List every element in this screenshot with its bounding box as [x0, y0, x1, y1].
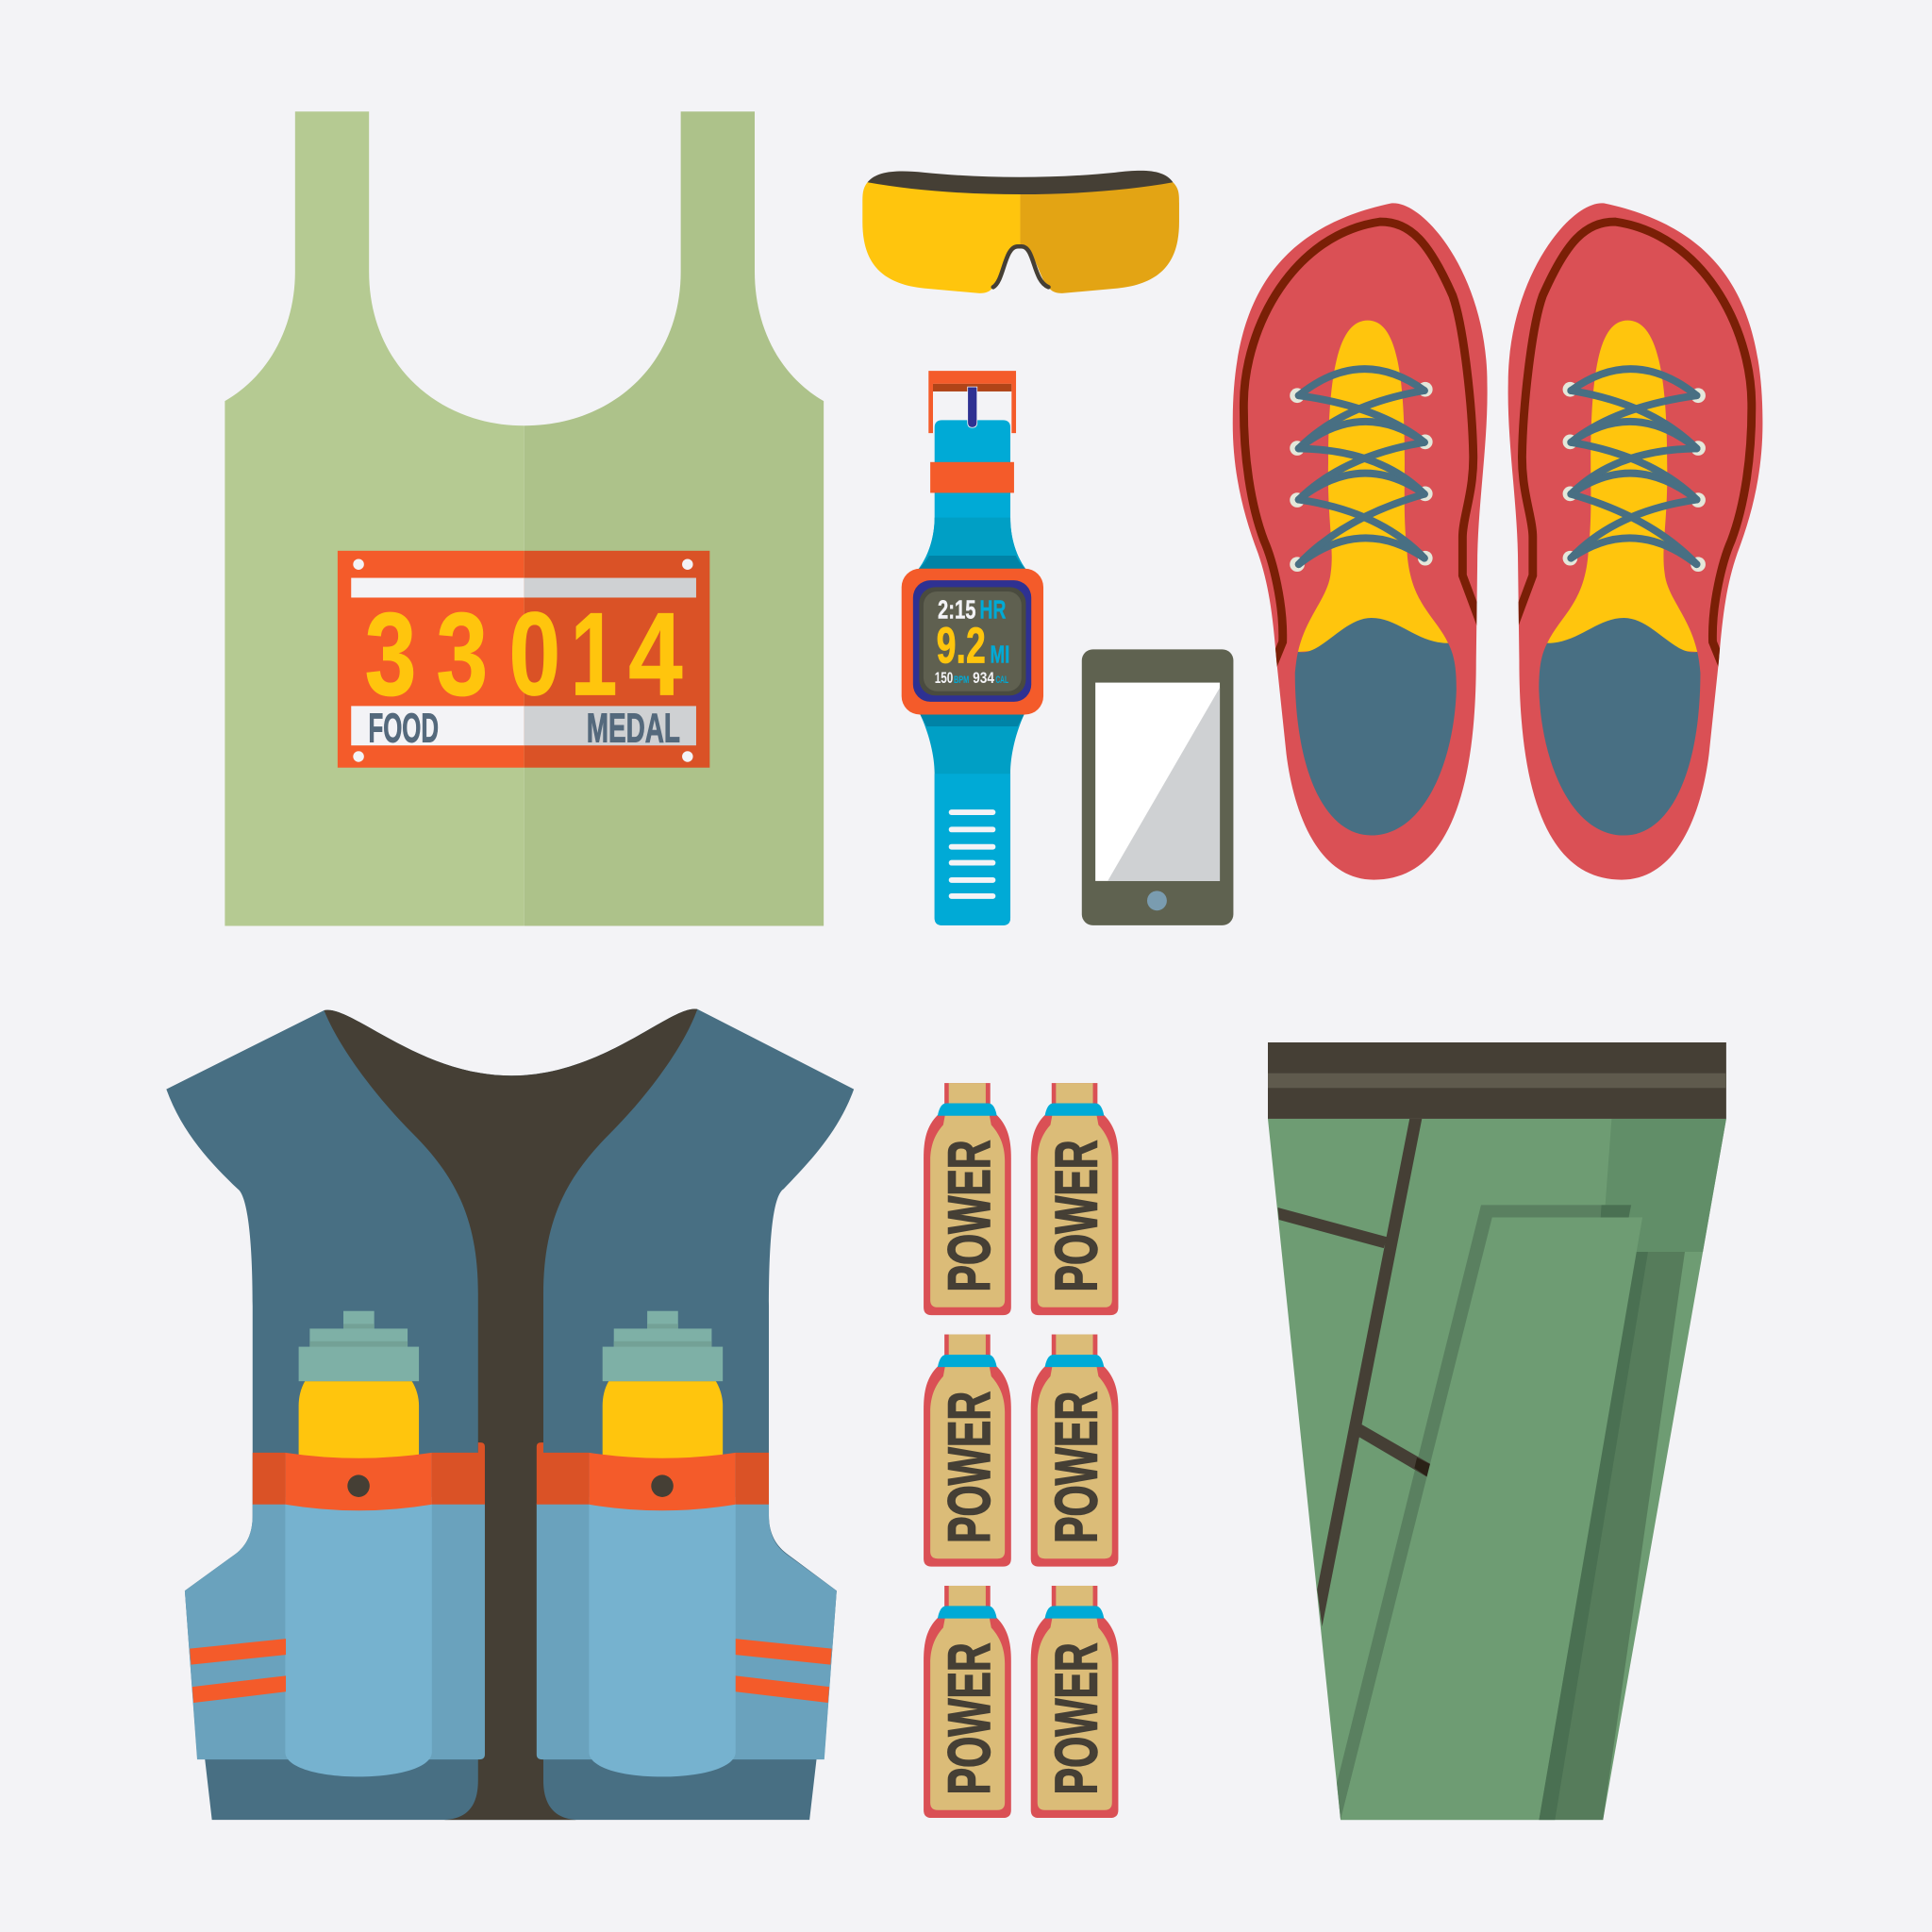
sunglasses: [862, 171, 1179, 293]
watch readout: HR: [979, 595, 1007, 625]
right running shoe: [1508, 203, 1762, 880]
energy drink bottle 3: POWER: [937, 1391, 1003, 1543]
home button: [1147, 891, 1167, 910]
bib labels: MEDAL: [587, 706, 680, 751]
bib number: 3: [436, 588, 488, 721]
running shorts: [1268, 1042, 1726, 1820]
vest centre zip: [325, 1008, 697, 1820]
bib labels: [369, 706, 680, 751]
watch readout: [935, 595, 1009, 687]
buckle: [928, 371, 1016, 433]
energy drink bottle 2: [1031, 1083, 1118, 1315]
smartwatch: [902, 371, 1043, 925]
seams: [1277, 1119, 1422, 1626]
lower strap: [918, 709, 1026, 925]
nose wire: [993, 246, 1049, 287]
left running shoe: [1233, 203, 1488, 880]
vest body: [166, 1008, 854, 1820]
energy drink bottle 5: POWER: [937, 1642, 1003, 1794]
waistband: [1268, 1042, 1726, 1119]
right belt: [537, 1442, 769, 1510]
left belt: [253, 1442, 485, 1510]
side stripes: [190, 1639, 832, 1703]
tank top: [225, 111, 824, 926]
upper strap: [915, 420, 1029, 573]
energy drink bottle 1: POWER: [937, 1140, 1003, 1291]
right bottle: [603, 1311, 723, 1466]
left bottle: [299, 1311, 419, 1466]
hydration vest: [166, 1008, 854, 1820]
left pocket panel: [185, 1503, 485, 1759]
bib number: [365, 588, 683, 721]
watch readout: 150: [935, 669, 953, 687]
watch readout: 2:15: [938, 595, 975, 625]
race bib: [338, 551, 709, 768]
tank top left half: [225, 111, 525, 926]
bib number: 1: [571, 588, 617, 721]
energy drink bottle 6: [1031, 1586, 1118, 1818]
tank top right half: [525, 111, 824, 926]
shorts right shade: [1602, 1119, 1726, 1252]
buckle pin: [968, 387, 977, 427]
bib number: 4: [628, 588, 683, 721]
shorts body: [1268, 1119, 1726, 1820]
watch readout: CAL: [995, 675, 1008, 686]
energy drink bottle 6: POWER: [1043, 1642, 1109, 1794]
energy drink bottle 1: [924, 1083, 1011, 1315]
bib labels: FOOD: [369, 706, 439, 751]
smartphone: [1082, 649, 1233, 925]
watch readout: BPM: [954, 675, 969, 686]
strap keeper: [930, 462, 1014, 492]
watch readout: MI: [990, 641, 1009, 669]
bib number: 0: [508, 588, 560, 721]
energy drink bottle 5: [924, 1586, 1011, 1818]
energy drink bottle 4: [1031, 1335, 1118, 1567]
right mesh pocket: [589, 1497, 736, 1776]
pocket back flap: [1337, 1205, 1631, 1820]
right pocket panel: [537, 1503, 837, 1759]
left mesh pocket: [285, 1497, 432, 1776]
energy drink bottle 3: [924, 1335, 1011, 1567]
watch case: [902, 569, 1043, 715]
lower seam: [1358, 1424, 1437, 1480]
watch readout: 9.2: [937, 619, 986, 675]
strap slats: [949, 809, 995, 899]
side panel: [1539, 1252, 1685, 1820]
energy drink bottle 4: POWER: [1043, 1391, 1109, 1543]
pocket front flap: [1341, 1217, 1642, 1820]
bib number: 3: [365, 588, 416, 721]
watch readout: 934: [973, 669, 994, 687]
energy drink bottle 2: POWER: [1043, 1140, 1109, 1291]
